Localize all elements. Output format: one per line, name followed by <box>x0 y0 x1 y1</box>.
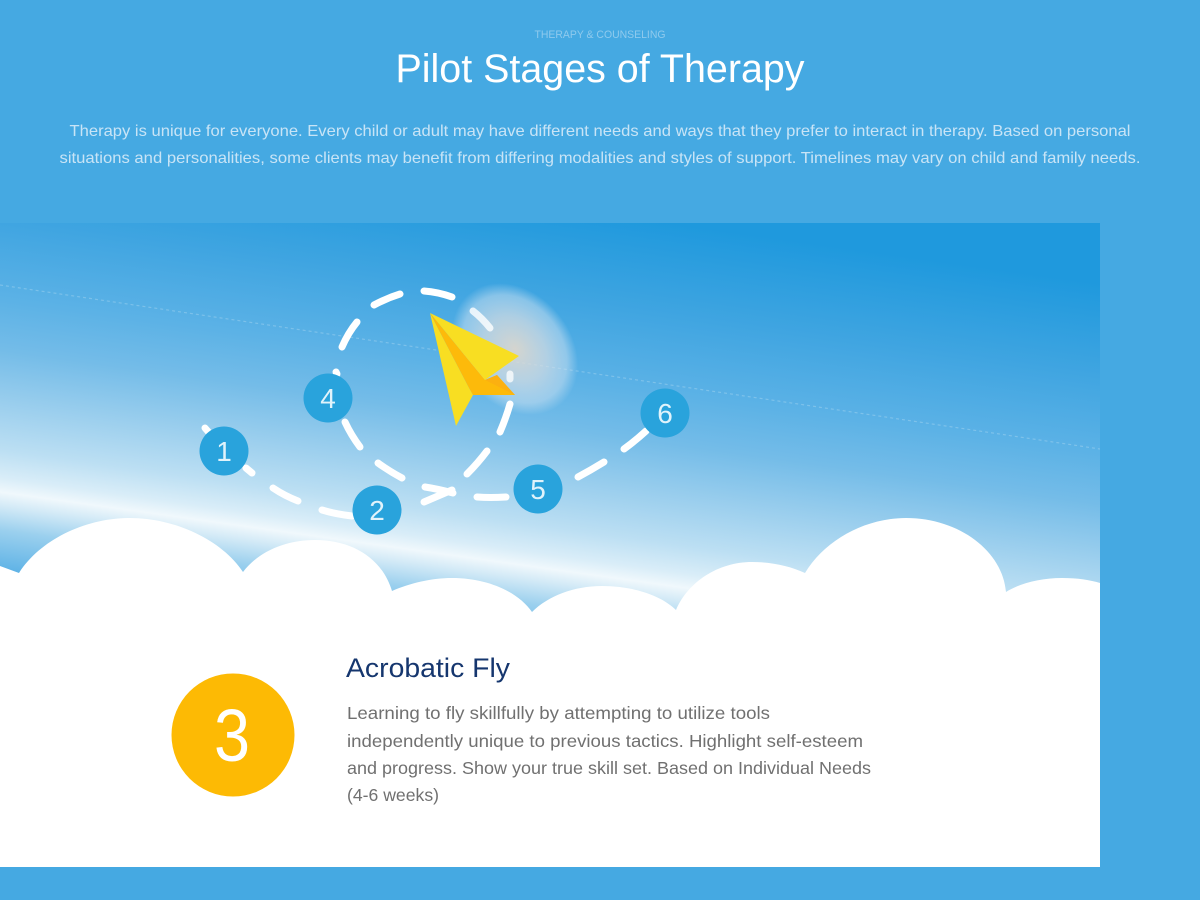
badge: active stage 3: 3 <box>214 694 250 777</box>
stage marker 6: 6 <box>657 398 673 429</box>
title: Pilot Stages of Therapy <box>396 47 804 91</box>
stage description: and progress. Show your true skill set. Based on Individual Needs <box>347 758 871 778</box>
intro paragraph: Therapy is unique for everyone. Every child or adult may have different needs and ways that they prefer to interact in therapy. Based on personal <box>70 123 1130 140</box>
stage description: Learning to fly skillfully by attempting to utilize tools <box>347 703 770 723</box>
panel: sky illustration and stage detail <box>0 223 1100 867</box>
stage marker 5 <box>514 464 562 514</box>
stage marker 4 <box>304 374 352 422</box>
icon: paper plane <box>430 313 519 426</box>
stage marker 2 <box>352 486 402 534</box>
stage description: independently unique to previous tactics. Highlight self-esteem <box>347 731 863 751</box>
stage marker 2: 2 <box>369 495 385 526</box>
badge: active stage 3 <box>172 674 294 796</box>
flight path <box>205 291 646 516</box>
stage description: (4-6 weeks) <box>347 785 439 805</box>
stage marker 6 <box>640 388 690 438</box>
contrail line <box>0 285 1100 449</box>
stage marker 4: 4 <box>320 383 336 414</box>
sky <box>0 223 1100 643</box>
glow behind plane <box>454 284 576 413</box>
eyebrow label: THERAPY & COUNSELING <box>534 29 666 41</box>
stage description <box>347 703 871 805</box>
clouds <box>0 518 1100 867</box>
stage heading: Acrobatic Fly <box>346 653 511 683</box>
stage marker 1: 1 <box>216 436 232 467</box>
intro paragraph <box>60 123 1140 167</box>
intro paragraph: situations and personalities, some clients may benefit from differing modalities and styles of support. Timelines may vary on child and family needs. <box>60 150 1140 167</box>
header <box>60 29 1140 167</box>
stage marker 1 <box>200 426 248 476</box>
stage marker 5: 5 <box>530 474 546 505</box>
